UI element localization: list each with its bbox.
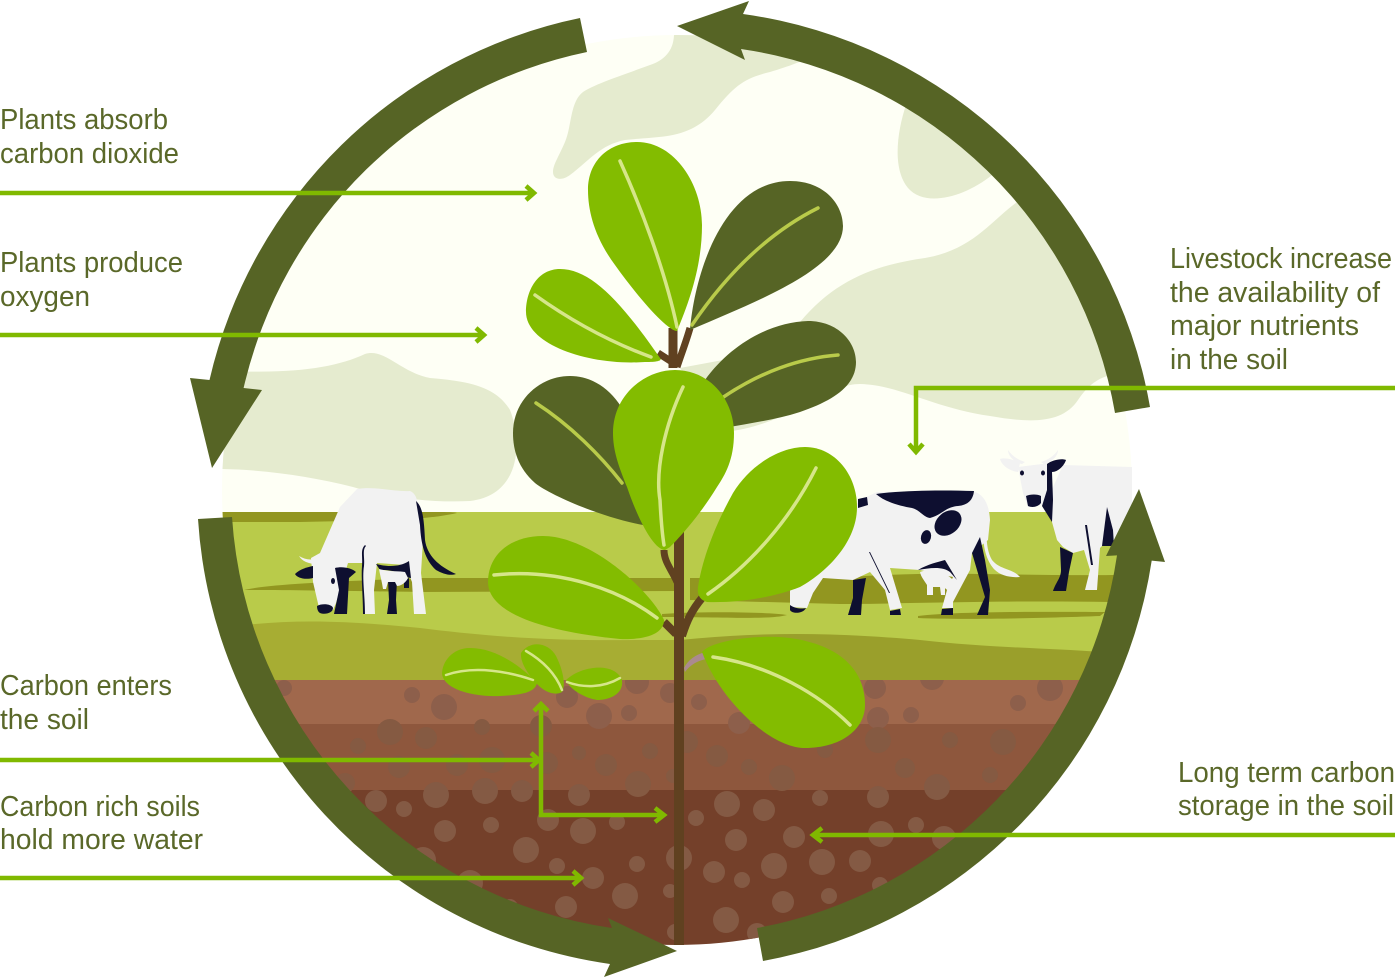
clouds <box>215 25 1140 501</box>
leaf: centre light <box>613 370 734 550</box>
label: plants produce oxygen <box>0 247 183 313</box>
label: plants absorb carbon dioxide <box>0 104 179 170</box>
leaf: middle right dark <box>705 321 856 428</box>
pebbles: topsoil <box>277 680 1063 734</box>
hill <box>252 622 674 680</box>
cow: left, grazing <box>295 488 456 614</box>
arrow: livestock nutrients <box>909 388 1395 452</box>
pebbles: subsoil <box>335 715 1016 797</box>
label: plants absorb carbon dioxide: carbon dioxide <box>0 138 179 170</box>
pebbles: all soil layers <box>276 666 1063 945</box>
label: livestock nutrients <box>1170 243 1392 376</box>
label: plants produce oxygen: Plants produce <box>0 247 183 279</box>
label: plants produce oxygen: oxygen <box>0 281 90 313</box>
arrow: produce oxygen <box>0 328 484 342</box>
plant <box>442 142 865 945</box>
leaf: middle left dark <box>513 376 643 525</box>
arrow: water holding soils <box>0 871 581 885</box>
label: plants absorb carbon dioxide: Plants absorb <box>0 104 168 136</box>
arrow: top left <box>190 18 587 468</box>
arrow: bottom right <box>757 489 1165 961</box>
label: livestock nutrients: the availability of <box>1170 277 1381 309</box>
soil layers <box>274 680 1080 724</box>
label: carbon enters the soil: Carbon enters <box>0 670 172 702</box>
cycle arrows <box>190 1 1165 977</box>
label: livestock nutrients: major nutrients <box>1170 310 1359 342</box>
seedling <box>442 644 622 700</box>
ground: grass <box>222 512 1117 652</box>
pebbles: deep soil <box>365 774 956 945</box>
label: carbon rich soils hold more water <box>0 791 203 856</box>
cow: right, standing <box>1000 450 1132 591</box>
label: carbon rich soils hold more water: hold more water <box>0 824 203 856</box>
callout arrows <box>0 186 1395 885</box>
leaf: upper left light <box>526 269 661 362</box>
label: carbon enters the soil: the soil <box>0 704 89 736</box>
arrow: carbon enters the soil <box>0 753 539 767</box>
cow: centre, spotted <box>790 490 1020 615</box>
leaf: lower right light <box>702 637 865 748</box>
stem and branches <box>658 328 702 945</box>
grass stripes <box>215 512 1120 619</box>
scene: circular landscape <box>200 20 1160 960</box>
root <box>684 652 706 672</box>
arrow: long term storage <box>813 828 1395 842</box>
arrow: top right <box>677 1 1150 413</box>
label: livestock nutrients: in the soil <box>1170 344 1288 376</box>
arrow: soil pathways <box>534 704 664 822</box>
leaf: right mid light <box>698 447 857 602</box>
leaf: left big light <box>488 536 664 639</box>
label: long term carbon storage <box>1178 757 1395 822</box>
leaf: upper right dark <box>690 181 843 330</box>
label: carbon enters the soil <box>0 670 172 736</box>
arrow: bottom left <box>198 517 677 977</box>
arrow: absorb carbon dioxide <box>0 186 534 200</box>
leaf: top light <box>588 142 702 331</box>
label: carbon rich soils hold more water: Carbon rich soils <box>0 791 200 823</box>
